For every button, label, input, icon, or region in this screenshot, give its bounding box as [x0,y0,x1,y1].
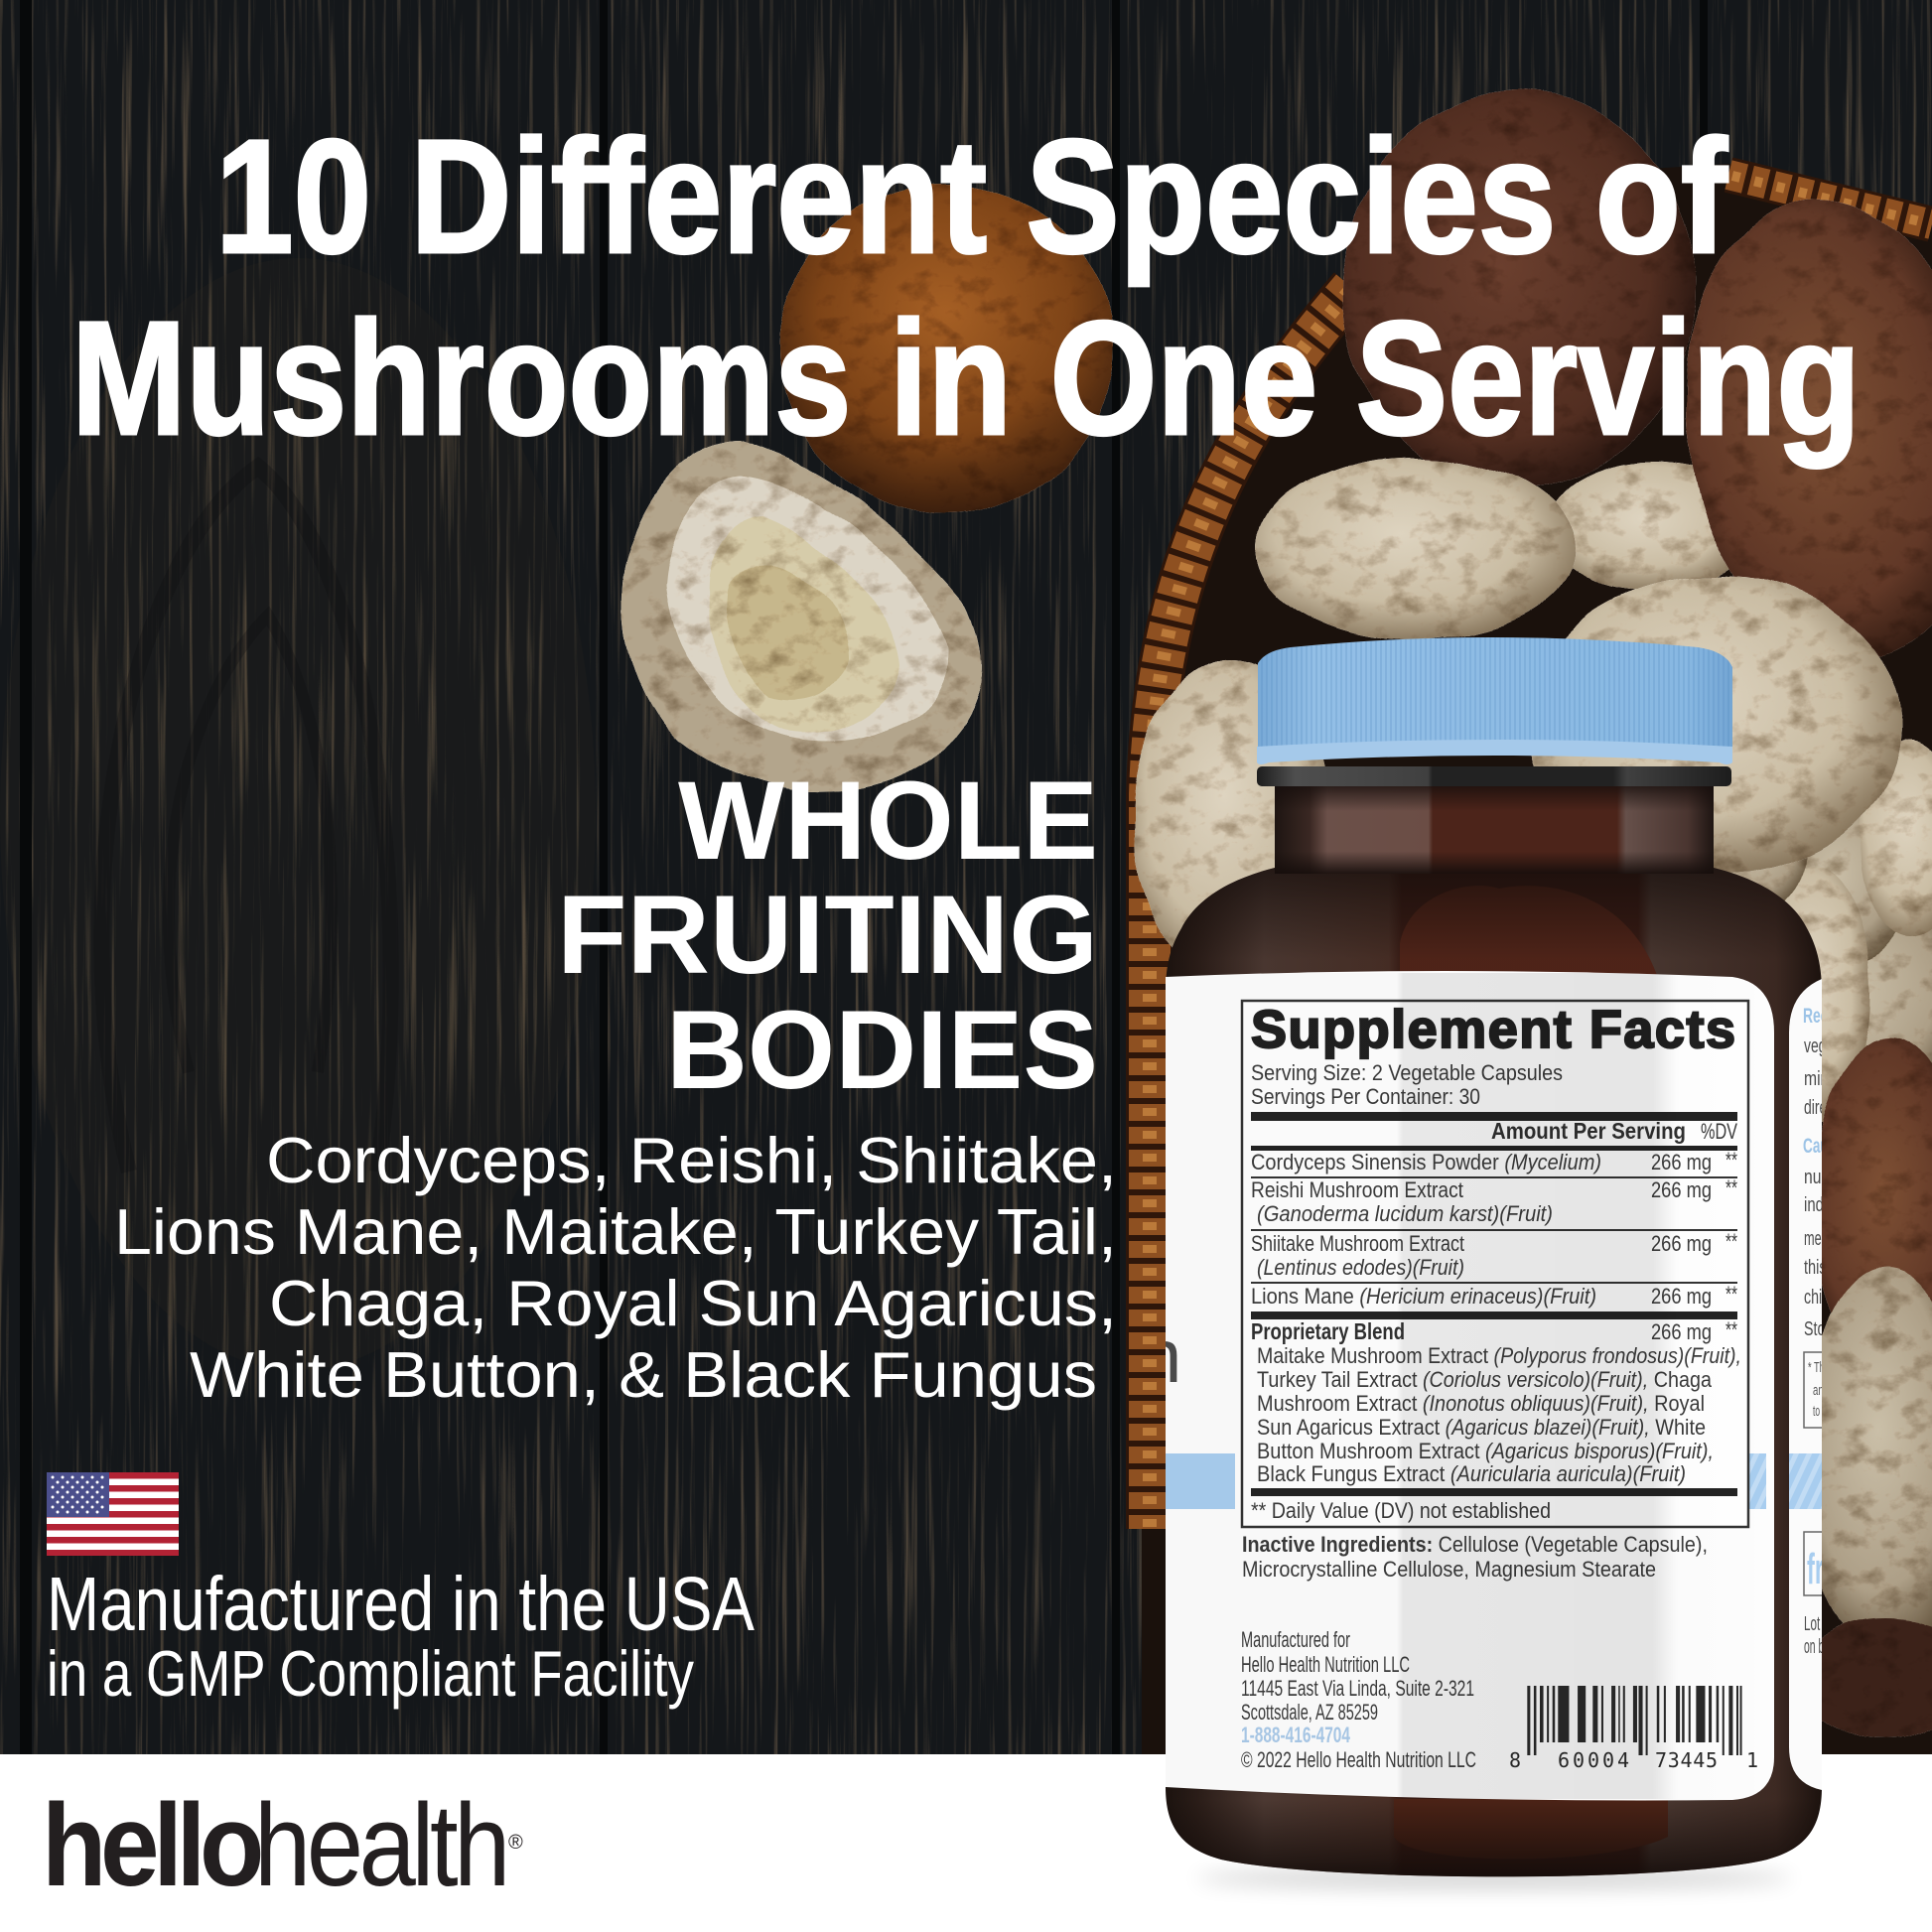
column headers: Amount Per Serving [1491,1118,1686,1144]
serving info [1251,1060,1563,1109]
front label blue band [1166,1453,1235,1509]
side label panel: * The [1808,1359,1830,1376]
side label panel: veget [1804,1035,1838,1057]
heading: whole fruiting bodies: WHOLE [678,759,1098,883]
mushroom: white button underside [621,441,983,792]
species list: Cordyceps, Reishi, Shiitake, [266,1124,1117,1196]
manufacturer address: © 2022 Hello Health Nutrition LLC [1241,1747,1476,1772]
icon: US flag [47,1472,179,1556]
row: proprietary blend: Proprietary Blend [1251,1318,1405,1344]
side label panel: direct [1804,1097,1838,1119]
supplement facts heading: Supplement Facts [1251,1000,1735,1059]
side label panel: childr [1804,1287,1838,1309]
row: proprietary blend [1251,1317,1737,1344]
basket [1142,164,1932,1754]
neck ring [1257,766,1731,786]
side label panel: min t [1804,1068,1838,1090]
column headers: %DV [1701,1119,1737,1144]
side label panel: Cauti [1803,1135,1837,1158]
bottle neck [1275,784,1714,874]
side label panel: nursi [1804,1167,1838,1188]
mushroom: dark top [1342,91,1696,488]
row: shiitake: (Lentinus edodes)(Fruit) [1257,1255,1464,1280]
manufacturer address [1241,1627,1476,1772]
row: shiitake: ** [1725,1229,1737,1254]
side label panel: this c [1804,1257,1838,1279]
row: lions mane: 266 mg [1651,1284,1712,1309]
row: reishi [1251,1175,1737,1226]
row: shiitake: Shiitake Mushroom Extract [1251,1231,1464,1256]
barcode: 8 [1509,1748,1521,1772]
mushroom: large white cap behind bottle [1529,576,1902,874]
hellohealth logo: hello [42,1780,261,1911]
mushroom: brown shiitake on table [776,185,1114,514]
inactive ingredients: Microcrystalline Cellulose, Magnesium Stearate [1242,1557,1656,1582]
manufacturer address: Hello Health Nutrition LLC [1241,1652,1410,1677]
row: reishi: ** [1725,1175,1737,1200]
manufacturing claim [47,1562,756,1710]
manufacturing claim: in a GMP Compliant Facility [47,1637,694,1710]
hellohealth logo: ® [508,1832,523,1854]
heading: whole fruiting bodies: FRUITING [557,873,1098,997]
species list [114,1124,1117,1411]
serving info: Servings Per Container: 30 [1251,1084,1480,1109]
blue cap [1257,637,1732,764]
row: cordyceps [1251,1148,1737,1174]
glass vertical shading [1166,868,1822,1882]
row: proprietary blend: ** [1725,1317,1737,1342]
barcode: 60004 [1558,1748,1629,1772]
inactive ingredients [1242,1532,1708,1582]
daily value note: ** Daily Value (DV) not established [1251,1498,1551,1523]
row: cordyceps: ** [1725,1148,1737,1173]
side label panel: indivi [1804,1194,1838,1216]
basket mushrooms: lower layers [1731,739,1932,1737]
row: cordyceps: Cordyceps Sinensis Powder (Mycelium) [1251,1150,1601,1174]
blend ingredients [1257,1343,1741,1486]
row: reishi: 266 mg [1651,1177,1712,1202]
side label panel: and [1813,1382,1829,1399]
row: lions mane: Lions Mane (Hericium erinaceus)(Fruit) [1251,1284,1596,1309]
main white label [1140,971,1774,1800]
mushroom: dark right [1686,199,1932,657]
capsules at base [1394,1799,1668,1859]
side label panel: Lot # [1804,1613,1831,1635]
barcode [1509,1686,1758,1772]
species list: Lions Mane, Maitake, Turkey Tail, [114,1195,1117,1268]
bottle shadow [1196,1868,1792,1888]
title [71,105,1861,469]
row: proprietary blend: 266 mg [1651,1319,1712,1344]
manufacturing claim: Manufactured in the USA [47,1562,756,1647]
hellohealth logo [42,1780,523,1911]
bottle glass body [1166,868,1822,1876]
manufacturer address: 1-888-416-4704 [1241,1723,1351,1747]
barcode: 73445 [1655,1748,1718,1772]
supplement facts panel [1242,1000,1748,1527]
manufacturer address: 11445 East Via Linda, Suite 2-321 [1241,1676,1474,1701]
front label product name fragment: n [1140,1314,1181,1399]
row: shiitake: 266 mg [1651,1231,1712,1256]
row: lions mane: ** [1725,1282,1737,1307]
bottle [1140,637,1838,1888]
heading: whole fruiting bodies: BODIES [666,988,1098,1112]
side label panel: fre [1807,1545,1837,1593]
row: shiitake [1251,1229,1737,1280]
hellohealth logo: health [254,1780,506,1911]
side label panel [1789,979,1822,1790]
species list: Chaga, Royal Sun Agaricus, [269,1267,1117,1339]
blend ingredients: Turkey Tail Extract (Coriolus versicolo)(Fruit), Chaga [1257,1367,1713,1392]
serving info: Serving Size: 2 Vegetable Capsules [1251,1060,1563,1085]
row: reishi: (Ganoderma lucidum karst)(Fruit) [1257,1201,1553,1226]
side label panel: medic [1804,1228,1838,1250]
row: reishi: Reishi Mushroom Extract [1251,1177,1463,1202]
row: cordyceps: 266 mg [1651,1150,1712,1174]
title: 10 Different Species of [215,105,1728,287]
mushroom: white left behind bottle [1134,659,1325,947]
side label panel: Reco [1803,1005,1837,1028]
inactive ingredients: Inactive Ingredients: Cellulose (Vegetable Capsule), [1242,1532,1708,1557]
side label panel: to di [1813,1403,1829,1420]
manufacturer address: Scottsdale, AZ 85259 [1241,1700,1378,1725]
species list: White Button, & Black Fungus [190,1338,1097,1411]
manufacturer address: Manufactured for [1241,1627,1350,1652]
label glass reflection [1398,973,1670,1799]
capsules inside shoulder [1400,886,1658,978]
side label panel: on bo [1804,1636,1830,1658]
blend ingredients: Sun Agaricus Extract (Agaricus blazei)(Fruit), White [1257,1415,1706,1440]
blend ingredients: Mushroom Extract (Inonotus obliquus)(Fruit), Royal [1257,1391,1705,1416]
blend ingredients: Maitake Mushroom Extract (Polyporus frondosus)(Fruit), [1257,1343,1741,1368]
mushroom: pale upper left [1258,457,1576,639]
mushroom: pale behind [1556,461,1729,590]
blend ingredients: Black Fungus Extract (Auricularia auricula)(Fruit) [1257,1461,1686,1486]
heading: whole fruiting bodies [557,759,1098,1112]
side label panel: Store [1804,1318,1838,1340]
barcode: 1 [1746,1748,1758,1772]
blend ingredients: Button Mushroom Extract (Agaricus bisporus)(Fruit), [1257,1439,1714,1463]
